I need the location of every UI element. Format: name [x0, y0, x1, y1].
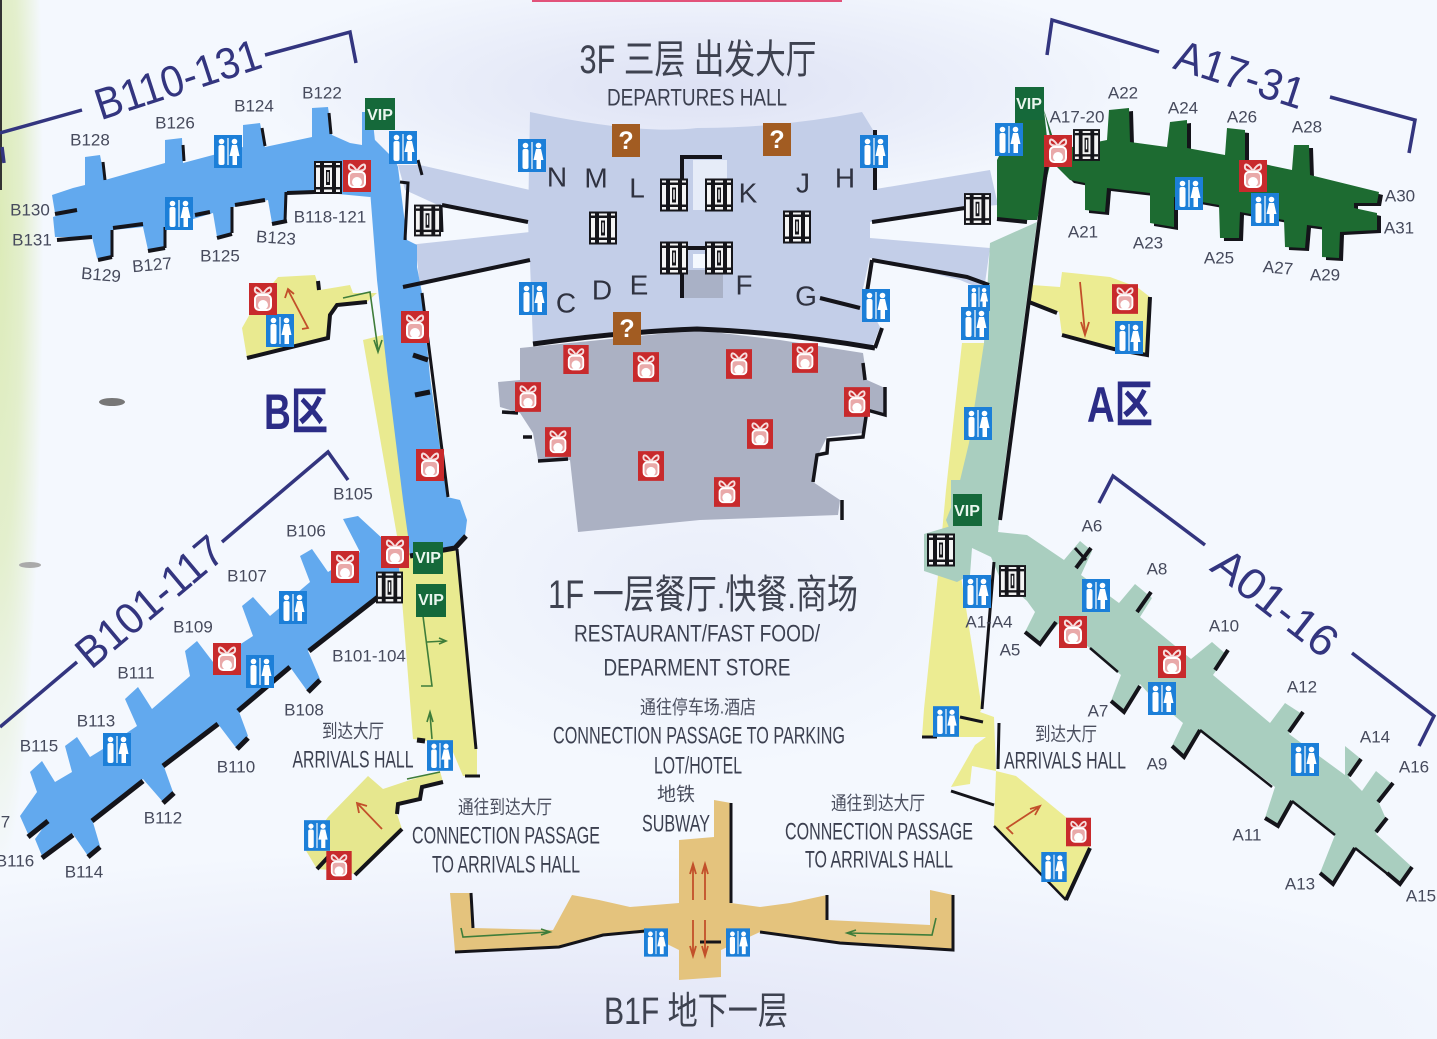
hall letters: check-in islands: F: [735, 270, 753, 300]
gate labels: A17-31: A27: [1262, 257, 1294, 279]
gate labels: B110-131: B131: [12, 230, 52, 250]
panel: lower arrivals gate B: [305, 771, 443, 874]
text block: arrivals hall A: [1004, 724, 1126, 774]
heading: 3F departures: 3F 三层 出发大厅: [580, 38, 816, 82]
gate labels: B101-117: B114: [65, 862, 103, 882]
wayfinding arrows: [285, 282, 1089, 956]
B110-131 walls: [55, 192, 315, 260]
A01-16 walls: [1025, 622, 1412, 884]
gate labels: B110-131: B123: [256, 227, 296, 249]
gate labels: B101-117: B101-104: [332, 646, 406, 666]
gate labels: A17-31: A26: [1227, 108, 1257, 126]
text block: arrivals hall B: ARRIVALS HALL: [292, 746, 414, 774]
basement walls: [455, 803, 953, 952]
panel: concourse A17-31 green: [997, 88, 1379, 258]
title: A17-31 range: A17-31: [1169, 31, 1311, 119]
gate labels: A01-16: A8: [1147, 560, 1167, 578]
B pier and strip walls: [400, 160, 480, 776]
B gate walls: [247, 281, 443, 875]
heading: 1F restaurant floor: 1F 一层餐厅.快餐.商场: [548, 573, 858, 617]
bracket: B110-131: [0, 32, 356, 163]
panel: upper arrivals gate A: [1029, 272, 1150, 355]
icon: VIP lounges: VIP: [954, 503, 980, 520]
heading: B1F basement: B1F 地下一层: [604, 991, 788, 1033]
panel: upper arrivals gate B: [242, 275, 377, 358]
gate labels: B110-131: B124: [234, 96, 274, 116]
panel: basement B1F passage: [450, 800, 953, 980]
gate labels: B110-131: B127: [131, 254, 173, 276]
panel: restaurant and store 1F floor: [498, 330, 885, 532]
gate labels: B101-117: B110: [217, 758, 255, 776]
arrow: red subway up and down: [690, 864, 708, 956]
hall letters: check-in islands: G: [795, 280, 817, 312]
gate labels: B110-131: B125: [200, 246, 240, 266]
panel: connecting grey bridges: [398, 165, 998, 290]
gate labels: A01-16: A13: [1285, 874, 1315, 894]
icons: shops: [213, 135, 1267, 880]
icon: VIP lounges: VIP: [367, 107, 393, 124]
panel: yellow arrivals strip A: [922, 272, 1150, 900]
arrow: red gate A upper: [1080, 282, 1089, 335]
icons: restrooms: [103, 123, 1319, 957]
panel: lower arrivals gate A: [994, 771, 1090, 900]
heading: 1F restaurant floor: RESTAURANT/FAST FOOD/: [574, 620, 820, 648]
text block: arrivals hall B: [292, 720, 414, 774]
gate labels: A01-16: A12: [1287, 678, 1317, 696]
gate labels: A17-31: A24: [1168, 98, 1198, 118]
brackets: [0, 20, 1434, 746]
gate labels: A17-31: A28: [1292, 118, 1322, 136]
text block: subway: [642, 784, 710, 838]
gate labels: A01-16: A10: [1209, 616, 1239, 636]
icon: information points: ?: [619, 315, 635, 343]
gate labels: B101-117: B111: [117, 664, 155, 682]
hall letters: check-in islands: E: [630, 270, 648, 300]
gate labels: A01-16: A7: [1088, 702, 1108, 720]
panel: concourse B101-117 blue: [20, 516, 400, 856]
heading: 1F restaurant floor: [548, 573, 858, 682]
title: A01-16 range: A01-16: [1202, 539, 1348, 667]
hall letters: check-in islands: K: [739, 178, 758, 208]
hall letters: check-in islands: J: [796, 168, 810, 198]
gate labels: A17-31: A31: [1384, 218, 1414, 238]
panel: blue main pier B: [365, 130, 467, 556]
icons: elevators: [314, 129, 1100, 603]
text block: arrivals hall B: 到达大厅: [322, 720, 384, 742]
text block: passage to parking: LOT/HOTEL: [654, 752, 742, 780]
gate labels: A01-16: A11: [1232, 826, 1262, 844]
gate labels: A17-31: [1050, 84, 1415, 284]
gate labels: A01-16: [965, 516, 1436, 906]
gate labels: A17-31: A22: [1108, 84, 1138, 102]
hall letters: check-in islands: N: [547, 162, 567, 192]
gate labels: A17-31: A29: [1310, 266, 1340, 284]
hall letters: check-in islands: H: [835, 162, 855, 194]
text block: left connection passage: 通往到达大厅: [458, 796, 552, 818]
gate labels: A01-16: A16: [1399, 758, 1429, 776]
arrow: red gate B upper: [285, 289, 308, 329]
arrow: red gate B lower: [357, 803, 382, 829]
bracket: A01-16: [1099, 476, 1434, 746]
panel: pale green pier and concourse A01-16: [924, 222, 1412, 884]
arrow: green basement left: [461, 928, 550, 937]
panel: green pier head A: [997, 88, 1050, 220]
icon: VIP lounges: [365, 87, 1044, 617]
bracket: A17-31: [1047, 20, 1415, 153]
text block: right connection passage: TO ARRIVALS HALL: [805, 846, 953, 874]
text block: left connection passage: CONNECTION PASSAGE: [412, 822, 600, 850]
gate labels: A01-16: A9: [1147, 754, 1167, 774]
heading: zone B: B区: [264, 384, 328, 440]
gate labels: B101-117: B113: [77, 712, 115, 730]
text block: arrivals hall A: 到达大厅: [1035, 724, 1097, 746]
gate labels: A01-16: A5: [1000, 640, 1020, 660]
icon: information points: ?: [769, 126, 785, 154]
hall letters: check-in islands: D: [592, 274, 612, 306]
panel: departures hall 3F floor: [528, 112, 880, 348]
gate labels: B101-117: B106: [286, 522, 326, 540]
gate labels: A17-31: A30: [1385, 186, 1415, 206]
icon: VIP lounges: VIP: [1016, 96, 1042, 113]
text block: subway: 地铁: [657, 784, 695, 806]
gate labels: B110-131: [10, 84, 366, 286]
title: B110-131 range: B110-131: [89, 30, 267, 130]
heading: 3F departures: [580, 38, 816, 112]
heading: 1F restaurant floor: DEPARMENT STORE: [604, 654, 790, 682]
gate labels: A01-16: A15: [1406, 886, 1436, 906]
gate labels: A01-16: A14: [1360, 728, 1390, 746]
heading: zone A: A区: [1087, 377, 1153, 433]
hall letters: check-in islands: L: [629, 172, 645, 204]
panel: concourse B110-131 blue: [52, 107, 467, 556]
text block: subway: SUBWAY: [642, 810, 710, 838]
gate labels: A17-31: A21: [1068, 222, 1098, 242]
icon: information points: [612, 123, 791, 345]
gate labels: A17-31: A25: [1204, 248, 1234, 268]
gate labels: A01-16: A1-A4: [965, 612, 1013, 632]
arrow: red gate A lower: [1007, 806, 1040, 834]
text block: right connection passage: 通往到达大厅: [831, 792, 925, 814]
gate labels: A17-31: A23: [1133, 234, 1163, 252]
gate labels: B101-117: B109: [173, 618, 213, 636]
hall letters: check-in islands: M: [584, 162, 608, 194]
icon: information points: ?: [618, 127, 634, 155]
gate labels: B110-131: B122: [302, 84, 342, 102]
text block: right connection passage: CONNECTION PASSAGE: [785, 818, 973, 846]
arrow: green basement right: [847, 918, 936, 936]
gate labels: B101-117: B105: [333, 484, 373, 504]
gate labels: B101-117: B107: [227, 566, 267, 586]
title: B101-117 range: B101-117: [66, 526, 234, 678]
gate labels: B110-131: B129: [80, 264, 122, 286]
gate labels: A17-31: A17-20: [1050, 108, 1104, 126]
text block: left connection passage: [412, 796, 600, 878]
gate labels: B110-131: B118-121: [294, 208, 366, 226]
panel: concourse A17-31 shadow: [1048, 111, 1383, 261]
gate labels: B101-117: B115: [20, 736, 58, 756]
text block: passage to parking: 通往停车场.酒店: [640, 696, 756, 718]
hall walls: [682, 130, 882, 348]
gate labels: A01-16: A6: [1082, 516, 1102, 536]
icon: VIP lounges: VIP: [418, 592, 444, 609]
hall letters: check-in islands: [547, 162, 855, 318]
arrow: green route B upper: [343, 292, 382, 352]
text block: right connection passage: [785, 792, 973, 874]
arrow: green route B lower: [407, 616, 446, 779]
icon: VIP lounges: VIP: [415, 550, 441, 567]
gate labels: B101-117: B112: [144, 808, 182, 828]
gate labels: B101-117: B108: [284, 700, 324, 720]
gate labels: B110-131: B128: [70, 130, 110, 150]
bracket: B101-117: [0, 452, 348, 727]
bridge walls: [403, 205, 989, 308]
gate labels: B110-131: B130: [10, 200, 50, 220]
gate labels: B110-131: B126: [155, 114, 195, 132]
panel: yellow arrivals strip B: [242, 275, 477, 776]
text block: arrivals hall A: ARRIVALS HALL: [1004, 748, 1126, 774]
A pier walls: [997, 163, 1150, 520]
hall letters: check-in islands: C: [556, 288, 576, 318]
wall lines: [28, 113, 1412, 952]
B101-117 walls: [28, 597, 378, 858]
gate labels: B101-117: [0, 484, 406, 882]
heading: 3F departures: DEPARTURES HALL: [607, 84, 787, 112]
text block: left connection passage: TO ARRIVALS HALL: [432, 852, 580, 878]
text block: passage to parking: [553, 696, 845, 780]
text block: passage to parking: CONNECTION PASSAGE TO PARKING: [553, 722, 845, 750]
